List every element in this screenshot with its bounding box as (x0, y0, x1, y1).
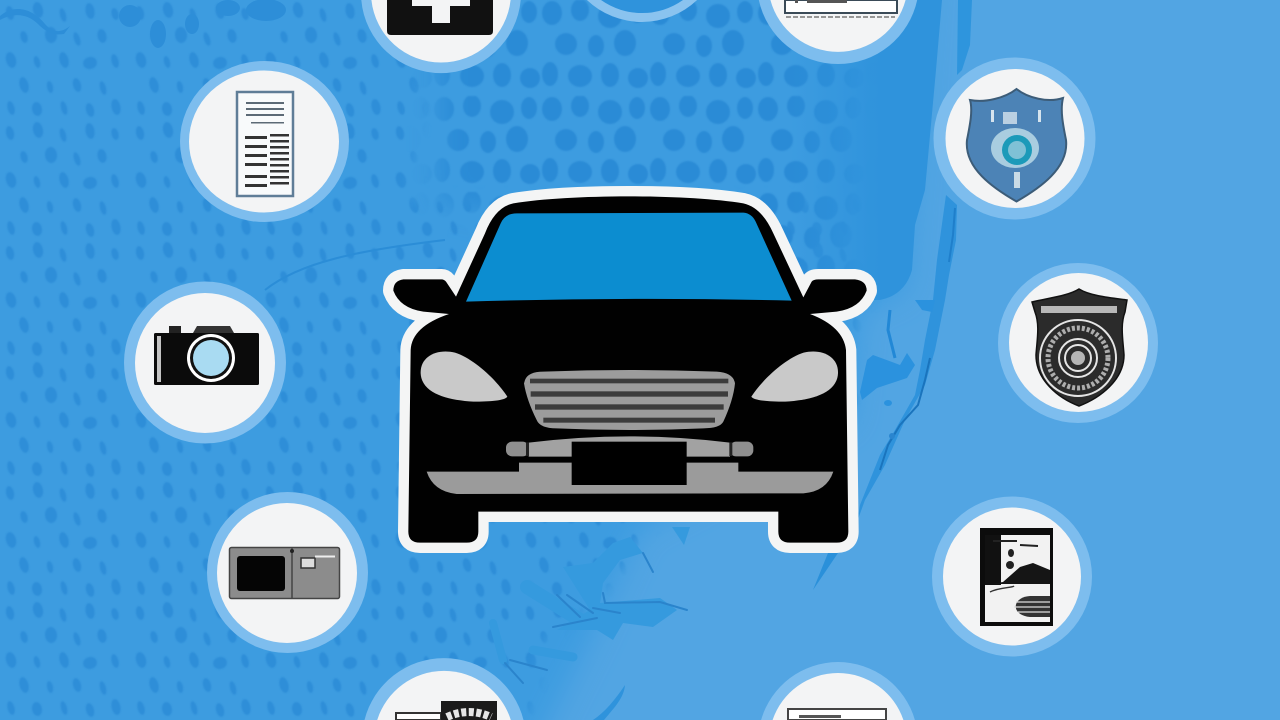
left headlight (421, 352, 507, 402)
circle: camera (124, 282, 286, 444)
central car (393, 196, 867, 543)
circle: police badge (998, 263, 1158, 423)
car windshield (466, 213, 792, 302)
circle: blue shield (934, 58, 1096, 220)
background: right band (790, 0, 942, 300)
background: river streaks (265, 0, 972, 720)
car white outline (393, 196, 867, 543)
icon: document (237, 92, 293, 196)
icon: police badge (1032, 289, 1127, 406)
car body (393, 196, 867, 543)
background: top-left river blobs (0, 0, 286, 48)
background: blobs right of car (860, 300, 935, 439)
circle: certificate (759, 0, 917, 64)
icon: first aid kit (387, 0, 493, 35)
icon: card with label (396, 701, 497, 720)
icon: blue shield badge (967, 89, 1066, 202)
car grille (524, 370, 735, 430)
icon: camera (154, 326, 259, 385)
circle: first aid kit (361, 0, 521, 73)
right headlight (751, 352, 838, 402)
circle: bottom left documents (364, 658, 524, 720)
icon: document (788, 709, 886, 720)
icon: framed photo (980, 528, 1053, 626)
circle: document (180, 61, 349, 222)
background: darker textured region (0, 0, 908, 720)
car bumper (427, 436, 833, 494)
background: blobs below car (493, 527, 690, 683)
license plate (572, 442, 687, 485)
icon: certificate (785, 0, 897, 17)
circle: cassette device (207, 492, 368, 653)
icon: cassette device (230, 548, 340, 598)
circle: framed photo (932, 496, 1092, 656)
circle: top partial ring (587, 0, 697, 22)
circle: bottom right document (761, 662, 915, 720)
